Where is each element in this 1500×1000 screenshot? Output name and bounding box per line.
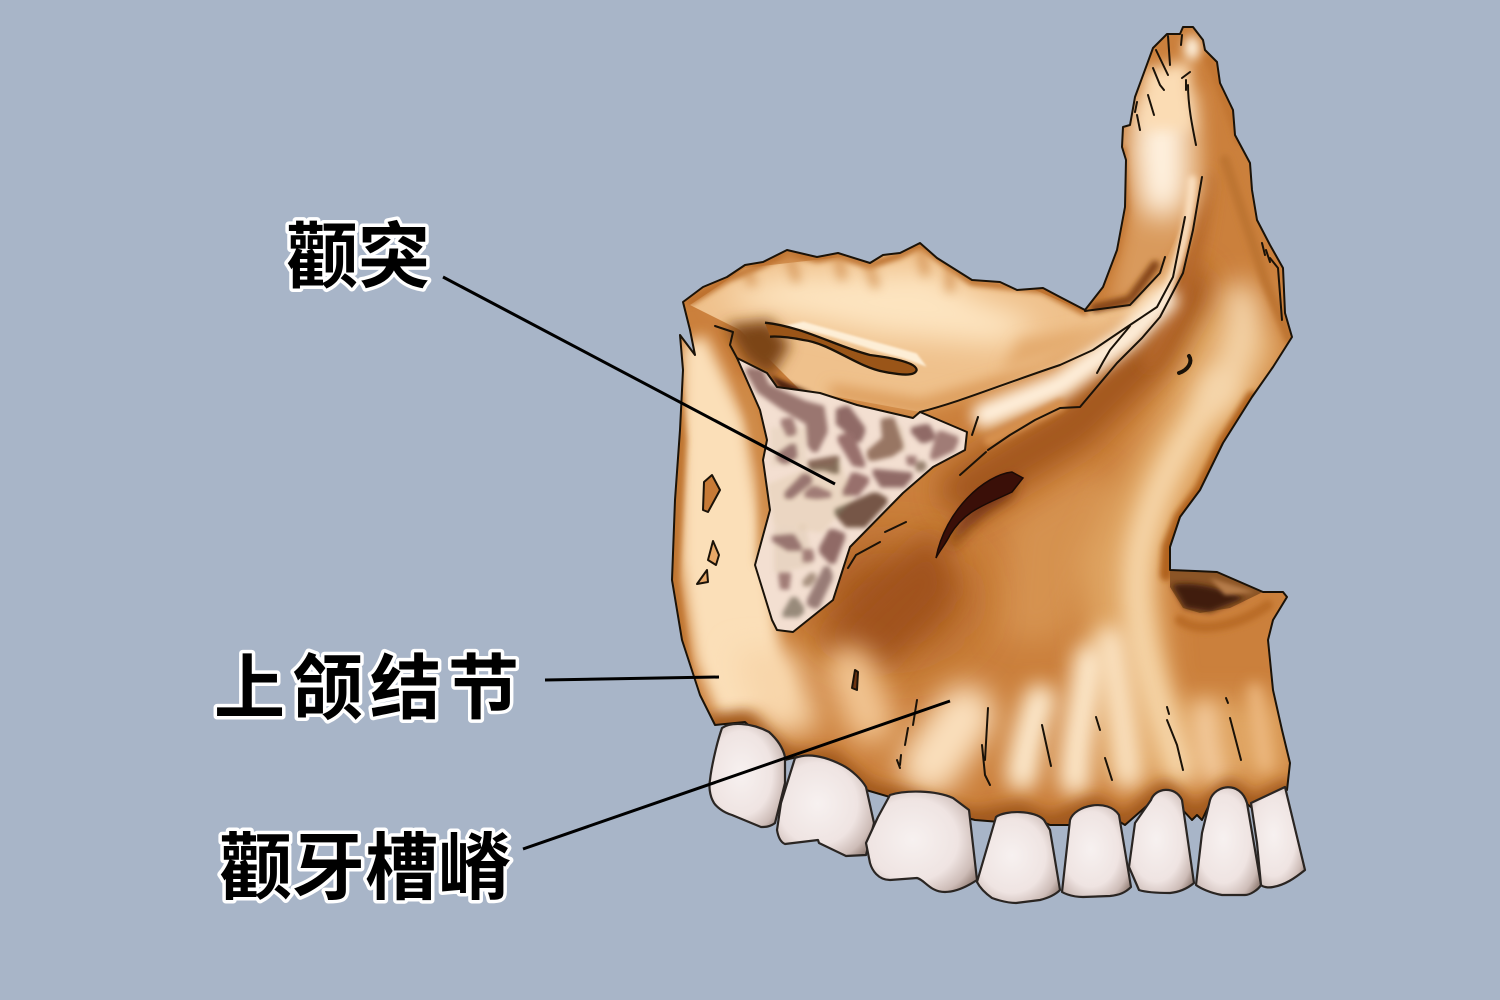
- tooth 4: [977, 812, 1060, 903]
- serrated top edge shadow: [690, 245, 1085, 312]
- leader line: maxillary tuberosity: [545, 677, 719, 680]
- tooth 7: [1196, 787, 1261, 895]
- mid face tones: [1000, 474, 1109, 642]
- band behind teeth: [715, 724, 1287, 827]
- sharp outline: [672, 27, 1292, 825]
- leader line: zygomatic process: [443, 277, 835, 484]
- tooth 6: [1129, 790, 1194, 893]
- maxilla bone: [672, 27, 1292, 827]
- right upper side: [1215, 300, 1244, 395]
- tooth 5: [1062, 805, 1131, 897]
- label: 颧牙槽嵴: 颧牙槽嵴: [219, 828, 511, 909]
- dark below rim: [965, 290, 1185, 490]
- dark orbit shadow: [725, 320, 790, 378]
- tooth 1: [709, 724, 785, 827]
- label: 上颌结节: 上颌结节: [214, 650, 526, 729]
- frontal process: [1110, 90, 1206, 305]
- tooth 8: [1251, 787, 1305, 887]
- long light ridge: [1137, 385, 1222, 770]
- tooth 2: [777, 756, 874, 856]
- infraorbital strip: [985, 300, 1165, 415]
- below nasal opening: [1180, 605, 1268, 627]
- teeth: [709, 724, 1305, 903]
- bone base shape: [672, 27, 1292, 825]
- fan of alveolar ridges: [1022, 700, 1040, 775]
- infraorbital foramen: [936, 472, 1023, 558]
- left tuber light strip: [680, 335, 790, 720]
- tooth 3: [866, 792, 977, 892]
- upper orbital shelf: [690, 236, 1180, 412]
- bone shading: [672, 36, 1290, 827]
- leader line: zygomaticoalveolar crest: [523, 701, 950, 849]
- nasal opening interior: [1170, 570, 1263, 613]
- ridge lines: [697, 35, 1282, 785]
- orbital groove: [765, 322, 927, 375]
- cancellous bone cross-section: [737, 358, 967, 632]
- label: 颧突: 颧突: [286, 218, 430, 298]
